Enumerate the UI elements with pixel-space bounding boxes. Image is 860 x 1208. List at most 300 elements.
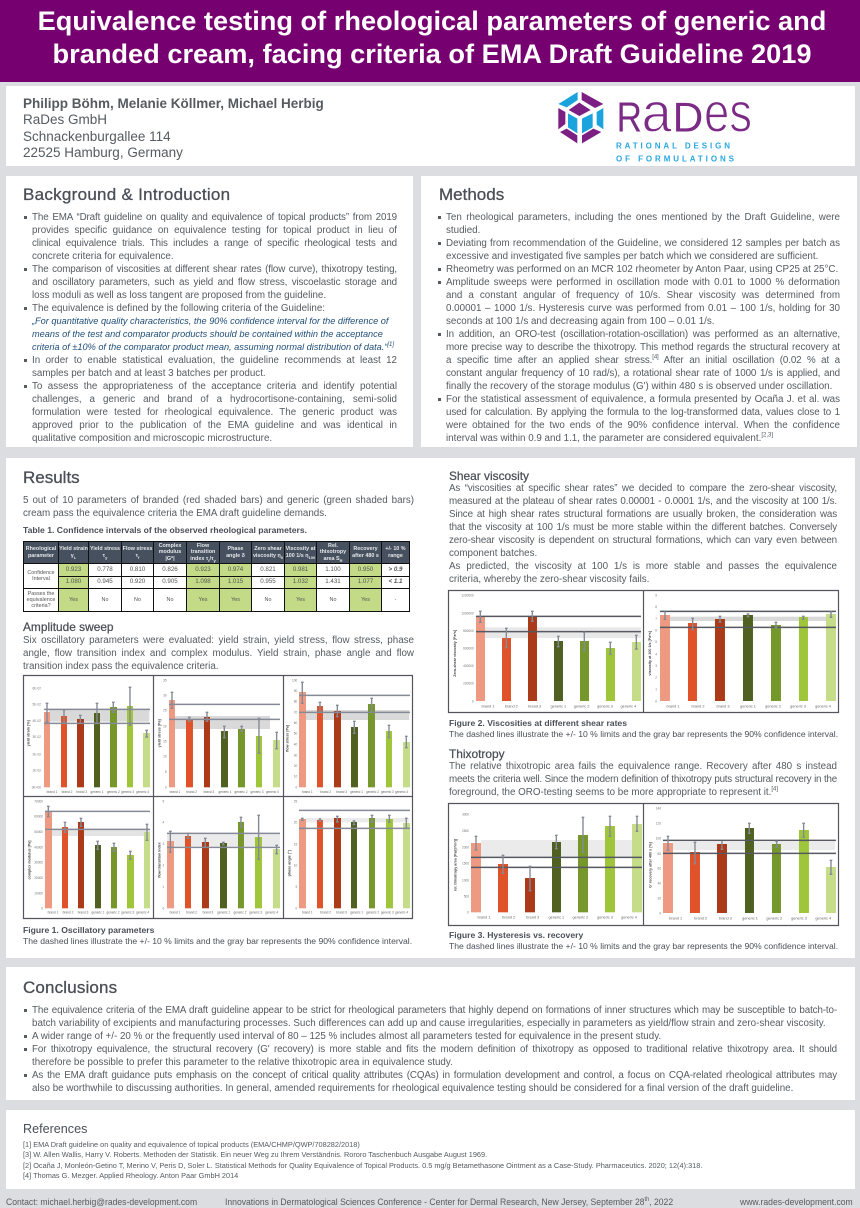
chart: yield stress: 20: [163, 724, 167, 728]
table 1: Yes: [231, 597, 240, 603]
chart: relative thixotropy area: generic 4: [621, 916, 638, 920]
text: methods bullets: seconds at 100 1/s and decreasing again from 100 – 0.01 1/s.: [446, 316, 715, 327]
chart: relative thixotropy area: brand 2: [502, 916, 515, 920]
chart: flow stress: 70: [294, 710, 298, 714]
chart: recovery after 480 s: 20: [657, 897, 661, 901]
chart: relative thixotropy area: generic 2: [572, 916, 588, 920]
chart: relative thixotropy area: generic 3: [597, 916, 613, 920]
text: results intro: [23, 495, 414, 519]
logo: RaDes: RATIONAL DESIGN: [616, 142, 730, 151]
reference list: [1] EMA Draft guideline on quality and equivalence of topical products (EMA/CHMP/QWP/708282/2018): [23, 1140, 360, 1149]
text: background bullets: challenges, a generic and brand of a hydrocortisone-containing, semi-solid: [32, 394, 397, 405]
chart: flow transition index: 2: [163, 864, 165, 868]
text: shear viscosity: measured at the plateau of shear rates 0.00001 - 0.0001 1/s, and the viscosity at 100 1/s.: [449, 496, 837, 507]
chart: recovery after 480 s: generic 2: [766, 916, 782, 920]
text: methods bullets: Amplitude sweeps were performed in oscillation mode with 0.01 to 1000 % deformation: [446, 277, 840, 288]
logo: RaDes: e: [704, 81, 729, 144]
authors and affiliation: RaDes GmbH: [23, 112, 107, 127]
chart: zero-shear viscosity: generic 3: [597, 704, 613, 708]
text: shear viscosity: [449, 483, 838, 585]
chart: flow stress: generic 4: [395, 790, 408, 794]
chart: complex modulus: 20000: [34, 876, 43, 880]
chart: yield stress: 0: [165, 785, 167, 789]
table 1: Rel. thixotropy area SR: [320, 543, 346, 563]
text: thixotropy: foreground, the ORO-testing seems to be more appropriate to represent it.[4]: [449, 787, 778, 798]
chart: phase angle: 20: [294, 821, 298, 825]
authors and affiliation: Schnackenburgallee 114: [23, 129, 171, 144]
chart: zero-shear viscosity: 1200000: [461, 594, 474, 598]
authors and affiliation: [23, 96, 324, 160]
logo: RaDes: a: [642, 81, 672, 144]
logo: RaDes: R: [617, 94, 642, 141]
panel: authors: [6, 86, 855, 166]
text: background bullets: The EMA “Draft guideline on quality and equivalence of topical products” from 2019: [32, 212, 397, 223]
text: conclusions bullets: As the EMA draft guidance puts emphasis on the concept of critical quality attributes (CQAs) in formulation development and control, a focus on CQA-related rheological attributes may: [32, 1070, 837, 1081]
chart: flow transition index: brand 1: [170, 911, 181, 915]
chart: flow transition index: generic 4: [265, 911, 278, 915]
text: methods bullets: Ten rheological parameters, including the ones mentioned by the Draft Guideline, were: [446, 212, 840, 223]
text: background bullets: qualitative composition and microscopic microstructure.: [32, 433, 272, 444]
table 1: No: [167, 597, 173, 603]
text: methods bullets: For the statistical assessment of equivalence, a formula presented by Ocaña J. et al. was: [446, 394, 840, 405]
chart: flow transition index: generic 1: [217, 911, 230, 915]
text: background bullets: samples per batch and at least 3 batches per product.: [32, 368, 266, 379]
reference list: [23, 1140, 702, 1180]
chart: viscosity at 100 1/s: 7: [655, 617, 657, 621]
figure 2 frame: [448, 590, 838, 712]
chart: viscosity at 100 1/s: 3: [655, 664, 657, 668]
heading: background: Background & Introduction: [23, 185, 230, 204]
chart: flow stress: generic 2: [366, 790, 379, 794]
chart: relative thixotropy area: 1500: [462, 862, 469, 866]
table 1: -: [395, 597, 396, 603]
chart: complex modulus: complex modulus [Pa]: [28, 840, 32, 880]
chart: recovery after 480 s: brand 1: [669, 916, 682, 920]
table 1: Yes: [296, 597, 305, 603]
text: shear viscosity: zero-shear viscosity is dependent on structural formations, which can vary even between: [449, 535, 837, 546]
chart: zero-shear viscosity: 200000: [463, 682, 474, 686]
title: Equivalence testing of rheological parameters of generic and: [38, 5, 826, 36]
text: amplitude sweep: angle, flow transition index and complex modulus. Yield strain, phase angle and flow: [23, 648, 414, 659]
text: background bullets: provides specific guidance on equivalence testing for topical product in lieu of: [32, 225, 397, 236]
chart: complex modulus: 10000: [34, 891, 43, 895]
text: shear viscosity: Since at high shear rates structural formations are usually broken, the consideration was: [449, 509, 837, 520]
table 1: 1.431: [325, 578, 341, 585]
text: shear viscosity: that the viscosity at 100 1/s must be more stable within the different batches. Conversely: [449, 522, 837, 533]
heading: amplitude sweep: Amplitude sweep: [23, 620, 114, 634]
text: methods bullets: Rheometry was performed on an MCR 102 rheometer by Anton Paar, using CP25 at 25°C.: [446, 264, 838, 275]
chart: flow transition index: generic 2: [233, 911, 247, 915]
table 1: Complex modulus |G*|: [159, 543, 181, 562]
text: thixotropy: meets the criteria well. Since the modern definition of thixotropy puts structural recovery in the: [449, 774, 837, 785]
chart: yield strain: brand 2: [62, 790, 73, 794]
chart: yield strain: generic 2: [107, 790, 120, 794]
chart: recovery after 480 s: 0: [659, 911, 661, 915]
chart: viscosity at 100 1/s: 5: [655, 640, 657, 644]
chart: viscosity at 100 1/s: viscosity at 100 1/s [Pa*s]: [648, 630, 652, 676]
text: amplitude sweep: [23, 635, 414, 672]
chart: flow transition index: 0: [163, 906, 165, 910]
text: conclusions bullets: For thixotropy equivalence, the structural recovery (G' recovery) is more stable and fits the modern definition of thixotropy as opposed to traditional relative thixotropy area. It should: [32, 1044, 837, 1055]
table 1: 1.080: [66, 578, 81, 585]
chart: yield stress: brand 3: [204, 790, 215, 794]
chart: zero-shear viscosity: Zero-shear viscosity [Pa*s]: [453, 629, 457, 677]
panel: methods: [421, 176, 857, 447]
chart: phase angle: 0: [296, 906, 298, 910]
heading: references: References: [23, 1122, 87, 1136]
chart: yield stress: [157, 678, 280, 794]
figure 2 note: The dashed lines illustrate the +/- 10 % limits and the gray bar represents the 90% confidence interval.: [449, 729, 838, 739]
table 1: No: [265, 597, 271, 603]
chart: zero-shear viscosity: brand 3: [528, 704, 541, 708]
chart: phase angle: 15: [294, 842, 298, 846]
panel: background: [6, 176, 413, 447]
text: background bullets: formulation were tested for rheological equivalence. The generic product was: [32, 407, 397, 418]
chart: zero-shear viscosity: brand 1: [482, 704, 494, 708]
chart: complex modulus: brand 1: [48, 911, 59, 915]
text: background bullets: loss moduli as well as loss tangent are proposed from the guideline.: [32, 290, 326, 301]
table 1: Confidence Interval: [27, 570, 55, 582]
chart: yield stress: generic 4: [266, 790, 279, 794]
chart: yield strain: generic 3: [121, 790, 134, 794]
chart: yield stress: generic 2: [234, 790, 248, 794]
reference list: [2] Ocaña J, Monleón-Getino T, Merino V, Peris D, Soler L. Statistical Methods for Quality Equivalence of Topical Products. 0.5 mg/g Betamethasone Ointment as a Case-Study. Pharmaceutics. 2020; 12(4):318.: [23, 1161, 702, 1170]
chart: viscosity at 100 1/s: 8: [655, 605, 657, 609]
chart: complex modulus: generic 4: [136, 911, 149, 915]
chart: flow stress: brand 3: [336, 790, 347, 794]
chart: zero-shear viscosity: generic 4: [620, 704, 637, 708]
chart: flow stress: 20: [294, 764, 298, 768]
chart: flow transition index: [157, 799, 280, 915]
text: conclusions bullets: therefore be possible to prefer this parameter to the relative thixotropic area in equivalence study.: [32, 1057, 453, 1068]
chart: relative thixotropy area: 0: [467, 911, 469, 915]
reference list: [3] W. Allen Wallis, Harry V. Roberts. Methoden der Statistik. Ein neuer Weg zu Ihrem Verständnis. Rororo Taschenbuch Ausgabe August 1969.: [23, 1150, 487, 1159]
chart: viscosity at 100 1/s: [648, 594, 836, 708]
chart: yield stress: 35: [163, 678, 167, 682]
figure 1 frame: [24, 676, 412, 918]
table 1: 0.821: [260, 566, 276, 573]
text: background bullets: [24, 212, 397, 444]
table 1: Yield stress τy: [90, 546, 120, 560]
heading: results: Results: [23, 468, 80, 487]
text: methods bullets: a specific time after an applied shear stress.[4] After an initial oscillation (0.02 % at a: [446, 355, 840, 366]
table 1: 0.923: [195, 566, 211, 573]
chart: phase angle: generic 1: [350, 911, 363, 915]
table caption: Table 1. Confidence intervals of the observed rheological parameters.: [23, 525, 307, 535]
text: methods bullets: were obtained for the two ends of the 90% confidence interval. When the confidence: [446, 420, 840, 431]
chart: zero-shear viscosity: 1000000: [461, 612, 474, 616]
panel: conclusions: [6, 967, 855, 1100]
table 1: 0.945: [97, 578, 113, 585]
chart: yield stress: brand 1: [170, 790, 181, 794]
chart: flow stress: generic 3: [381, 790, 394, 794]
chart: recovery after 480 s: generic 4: [815, 916, 832, 920]
text: background bullets: To assess the appropriateness of the acceptance criteria and identify potential: [32, 381, 397, 392]
chart: flow stress: [285, 678, 410, 794]
chart: phase angle: brand 2: [320, 911, 331, 915]
chart: relative thixotropy area: 1000: [462, 878, 469, 882]
table 1: Yes: [199, 597, 207, 603]
chart: phase angle: 25: [294, 799, 298, 803]
chart: yield stress: generic 3: [250, 790, 264, 794]
chart: viscosity at 100 1/s: brand 3: [716, 704, 729, 708]
chart: flow stress: 90: [294, 689, 298, 693]
chart: yield strain: generic 1: [90, 790, 104, 794]
chart: phase angle: 10: [294, 864, 298, 868]
text: amplitude sweep: Six oscillatory parameters were evaluated: yield strain, yield stress, flow stress, phase: [23, 635, 414, 646]
chart: viscosity at 100 1/s: generic 3: [790, 704, 806, 708]
text: background bullets: means of the test and comparator products should be contained within the acceptance: [32, 329, 383, 339]
table 1: 0.905: [162, 578, 178, 585]
chart: relative thixotropy area: 3000: [462, 813, 469, 817]
table 1: 1.098: [195, 578, 211, 585]
heading: thixotropy: Thixotropy: [449, 747, 505, 761]
chart: flow stress: 40: [294, 743, 298, 747]
table 1: 1.100: [325, 566, 341, 573]
figure 1 note: The dashed lines illustrate the +/- 10 % limits and the gray bar represents the 90% confidence interval.: [23, 936, 412, 946]
text: results intro: cream pass the equivalence criteria the EMA draft guideline demands.: [23, 508, 327, 519]
chart: flow transition index: generic 3: [249, 911, 262, 915]
table 1: 1.077: [358, 578, 373, 585]
chart: recovery after 480 s: 40: [657, 882, 661, 886]
chart: recovery after 480 s: 120: [656, 822, 661, 826]
text: conclusions bullets: batch variability of excipients and manufacturing processes. Such differences can add up and cause irregularities, especially in parameters as yield/flow strain and zero-shear viscosity.: [32, 1018, 826, 1029]
chart: flow stress: flow stress [Pa]: [285, 724, 289, 752]
chart: viscosity at 100 1/s: brand 2: [691, 704, 704, 708]
table 1: Zero shear viscosity η0: [253, 546, 283, 560]
chart: phase angle: brand 1: [302, 911, 313, 915]
chart: phase angle: generic 4: [395, 911, 408, 915]
chart: viscosity at 100 1/s: generic 1: [740, 704, 756, 708]
table 1: Phase angle δ: [226, 546, 245, 558]
chart: yield stress: 15: [163, 739, 167, 743]
table 1: Flow transition index τf/τy: [190, 543, 216, 563]
chart: recovery after 480 s: brand 2: [694, 916, 707, 920]
text: thixotropy: [449, 761, 837, 798]
text: shear viscosity: criteria, whereby the zero-shear viscosity fails.: [449, 574, 649, 585]
chart: viscosity at 100 1/s: 1: [655, 688, 657, 692]
chart: viscosity at 100 1/s: 2: [655, 676, 657, 680]
table 1: 0.974: [228, 566, 243, 573]
chart: yield stress: 5: [165, 770, 167, 774]
table 1: > 0.9: [389, 566, 402, 573]
chart: complex modulus: 60000: [34, 815, 43, 819]
text: background bullets: The comparison of viscosities at different shear rates (flow curve), thixotropy testing,: [32, 264, 397, 275]
table 1: 1.032: [293, 578, 308, 585]
table 1: 0.826: [162, 566, 178, 573]
chart: zero-shear viscosity: [453, 594, 641, 708]
chart: yield strain: brand 1: [47, 790, 58, 794]
table 1: Recovery after 480 s: [352, 546, 379, 558]
chart: yield strain: generic 4: [136, 790, 149, 794]
chart: flow transition index: 1: [163, 885, 165, 889]
chart: complex modulus: 30000: [34, 861, 43, 865]
reference list: [4] Thomas G. Mezger. Applied Rheology. Anton Paar GmbH 2014: [23, 1171, 238, 1180]
chart: complex modulus: 70000: [34, 799, 43, 803]
text: methods bullets: excessive and investigated five samples per batch which we considered are sufficient.: [446, 251, 818, 262]
text: background bullets: „For quantitative quality characteristics, the 90% confidence interval for the difference of: [32, 316, 388, 326]
chart: flow transition index: 3: [163, 842, 165, 846]
text: conclusions bullets: A wider range of +/- 20 % or the frequently used interval of 80 – 125 % includes almost all parameters tested for equivalence in the present study.: [32, 1031, 661, 1042]
chart: phase angle: generic 3: [381, 911, 394, 915]
table 1: No: [102, 597, 108, 603]
chart: flow stress: 50: [294, 732, 298, 736]
table 1: 0.955: [260, 578, 276, 585]
table 1: Yield strain γL: [59, 546, 88, 560]
table 1: < 1.1: [389, 578, 402, 585]
chart: zero-shear viscosity: 0: [472, 699, 474, 703]
chart: flow stress: 10: [294, 775, 298, 779]
footer: conference: Innovations in Dermatological Sciences Conference - Center for Dermal Research, New Jersey, September 28th, 2022: [225, 1197, 673, 1207]
table 1: Passes the equivalence criteria?: [27, 591, 55, 609]
chart: phase angle: [287, 799, 410, 915]
text: methods bullets: more precise way to describe the thixotropy. This method regards the structural recovery at: [446, 342, 840, 353]
chart: recovery after 480 s: G' recovery after 480 s [%]: [649, 841, 653, 888]
chart: relative thixotropy area: [454, 813, 642, 920]
chart: flow stress: brand 2: [320, 790, 331, 794]
text: methods bullets: [438, 212, 840, 444]
table 1: 0.920: [130, 578, 145, 585]
table 1: Viscosity at 100 1/s η100: [286, 546, 315, 560]
text: methods bullets: constant angular frequency of 10 rad/s), a rotational shear rate of 1000 1/s is applied, and: [446, 368, 840, 379]
table 1: Flow stress τf: [123, 546, 152, 560]
chart: zero-shear viscosity: generic 1: [550, 704, 566, 708]
authors and affiliation: Philipp Böhm, Melanie Köllmer, Michael Herbig: [23, 96, 324, 111]
table 1: +/- 10 % range: [385, 546, 406, 558]
text: shear viscosity: As predicted, the viscosity at 100 1/s is more stable and passes the equivalence: [449, 561, 837, 572]
chart: relative thixotropy area: 2000: [462, 846, 469, 850]
chart: complex modulus: 40000: [34, 845, 43, 849]
text: conclusions bullets: The equivalence criteria of the EMA draft guideline appear to be strict for rheological parameters that highly depend on formations of inner structures which may be susceptible to batch-to-: [32, 1005, 837, 1016]
chart: complex modulus: brand 3: [78, 911, 89, 915]
chart: viscosity at 100 1/s: generic 4: [815, 704, 832, 708]
logo: RaDes: [558, 81, 752, 163]
chart: flow transition index: 5: [163, 799, 165, 803]
chart: yield strain: 3E-02: [33, 735, 41, 739]
table 1: No: [330, 597, 336, 603]
chart: viscosity at 100 1/s: generic 2: [765, 704, 781, 708]
chart: flow stress: 30: [294, 753, 298, 757]
chart: phase angle: phase angle [°]: [287, 850, 291, 876]
heading: conclusions: Conclusions: [23, 978, 117, 997]
footer: contact: Contact: michael.herbig@rades-development.com: [6, 1197, 197, 1207]
text: methods bullets: and a constant angular of frequency of 10/s. Shear viscosity was determined from: [446, 290, 840, 301]
table 1: 0.923: [66, 566, 81, 573]
chart: zero-shear viscosity: generic 2: [574, 704, 590, 708]
chart: recovery after 480 s: 100: [656, 837, 661, 841]
chart: complex modulus: generic 1: [91, 911, 105, 915]
chart: phase angle: 5: [296, 885, 298, 889]
chart: complex modulus: generic 3: [121, 911, 134, 915]
text: background bullets: The equivalence is defined by the following criteria of the Guideline:: [32, 303, 325, 314]
table 1: Yes: [69, 597, 78, 603]
chart: viscosity at 100 1/s: 4: [655, 652, 657, 656]
chart: flow stress: 0: [296, 785, 298, 789]
table 1: No: [134, 597, 141, 603]
chart: flow stress: 100: [292, 678, 298, 682]
text: shear viscosity: component batches.: [449, 548, 537, 559]
chart: complex modulus: brand 2: [63, 911, 74, 915]
chart: yield stress: brand 2: [186, 790, 197, 794]
chart: viscosity at 100 1/s: 0: [655, 699, 657, 703]
table 1: 0.810: [130, 566, 145, 573]
text: background bullets: clinical equivalence trials. This includes a range of specific rheological tests and: [32, 238, 397, 249]
chart: flow transition index: brand 2: [186, 911, 197, 915]
chart: yield strain: brand 3: [76, 790, 87, 794]
chart: recovery after 480 s: generic 3: [791, 916, 807, 920]
text: background bullets: criteria of ±10% of the comparator product mean, assuming normal distribution of data.“[1]: [32, 342, 394, 352]
table 1: 1.015: [228, 578, 243, 585]
chart: flow transition index: 4: [163, 821, 165, 825]
table 1: 0.778: [97, 566, 113, 573]
footer: website: www.rades-development.com: [740, 1197, 853, 1207]
figure 1 caption: Figure 1. Oscillatory parameters: [23, 925, 154, 935]
chart: zero-shear viscosity: 400000: [463, 664, 474, 668]
chart: flow transition index: brand 3: [203, 911, 214, 915]
figure 3 note: The dashed lines illustrate the +/- 10 % limits and the gray bar represents the 90% confidence interval.: [449, 941, 838, 951]
text: background bullets: In order to enable statistical evaluation, the guideline recommends at least 12: [32, 355, 397, 366]
heading: methods: Methods: [439, 185, 504, 204]
chart: yield strain: 0E+00: [32, 785, 41, 789]
chart: phase angle: generic 2: [366, 911, 379, 915]
table 1: [23, 541, 410, 612]
chart: recovery after 480 s: 140: [656, 806, 661, 810]
text: methods bullets: 0.00001 – 1000 1/s. Hysteresis curve was performed from 0.01 – 100 1/s, holding for 30: [446, 303, 840, 314]
chart: yield stress: generic 1: [218, 790, 232, 794]
chart: phase angle: brand 3: [336, 911, 347, 915]
text: background bullets: approved prior to the publication of the EMA guideline and was identical in: [32, 420, 397, 431]
chart: yield strain: 6E-02: [33, 686, 41, 690]
chart: complex modulus: 0: [41, 906, 43, 910]
chart: recovery after 480 s: 60: [657, 867, 661, 871]
chart: viscosity at 100 1/s: brand 1: [666, 704, 679, 708]
title: branded cream, facing criteria of EMA Draft Guideline 2019: [53, 38, 811, 69]
table 1: Rheological parameter: [26, 546, 56, 558]
figure 2 caption: Figure 2. Viscosities at different shear rates: [449, 718, 627, 728]
header banner: [0, 0, 860, 82]
chart: zero-shear viscosity: 800000: [463, 629, 474, 633]
table 1: Yes: [361, 597, 370, 603]
heading: shear viscosity: Shear viscosity: [449, 469, 529, 483]
chart: relative thixotropy area: rel. thixotropy area [Pa/(s*m³)]: [454, 838, 458, 891]
text: shear viscosity: As “viscosities at specific shear rates” we decided to compare the zero-shear viscosity,: [449, 483, 837, 494]
chart: relative thixotropy area: 2500: [462, 829, 469, 833]
chart: relative thixotropy area: brand 3: [526, 916, 539, 920]
text: methods bullets: used for calculation. By applying the formula to the log-transformed data, values close to 1: [446, 407, 840, 418]
chart: viscosity at 100 1/s: 6: [655, 628, 657, 632]
figure 3 frame: [448, 804, 838, 926]
chart: yield strain: [27, 686, 150, 794]
chart: yield stress: 30: [163, 693, 167, 697]
text: methods bullets: In addition, an ORO-test (oscillation-rotation-oscillation) was performed as an alternative,: [446, 329, 840, 340]
chart: complex modulus: 50000: [34, 830, 43, 834]
chart: yield strain: 2E-02: [33, 752, 41, 756]
chart: relative thixotropy area: brand 1: [478, 916, 490, 920]
text: conclusions bullets: also be worthwhile to discussing authorities. In general, amended requirements for rheological equivalence testing should be considered for a final version of the draft guideline.: [32, 1083, 793, 1094]
chart: flow transition index: flow transition index: [157, 842, 161, 878]
text: background bullets: concrete criteria for equivalence.: [32, 251, 174, 262]
chart: yield strain: 4E-02: [33, 719, 41, 723]
chart: zero-shear viscosity: 600000: [463, 647, 474, 651]
chart: complex modulus: [28, 799, 150, 915]
logo: RaDes: s: [729, 81, 752, 144]
chart: flow stress: 60: [294, 721, 298, 725]
text: methods bullets: Deviating from recommendation of the Guideline, we considered 12 samples per batch as: [446, 238, 840, 249]
chart: flow stress: 80: [294, 700, 298, 704]
table 1: 0.981: [293, 566, 308, 573]
panel: references: [6, 1110, 855, 1189]
text: thixotropy: The relative thixotropic area fails the equivalence range. Recovery after 480 s instead: [449, 761, 837, 772]
